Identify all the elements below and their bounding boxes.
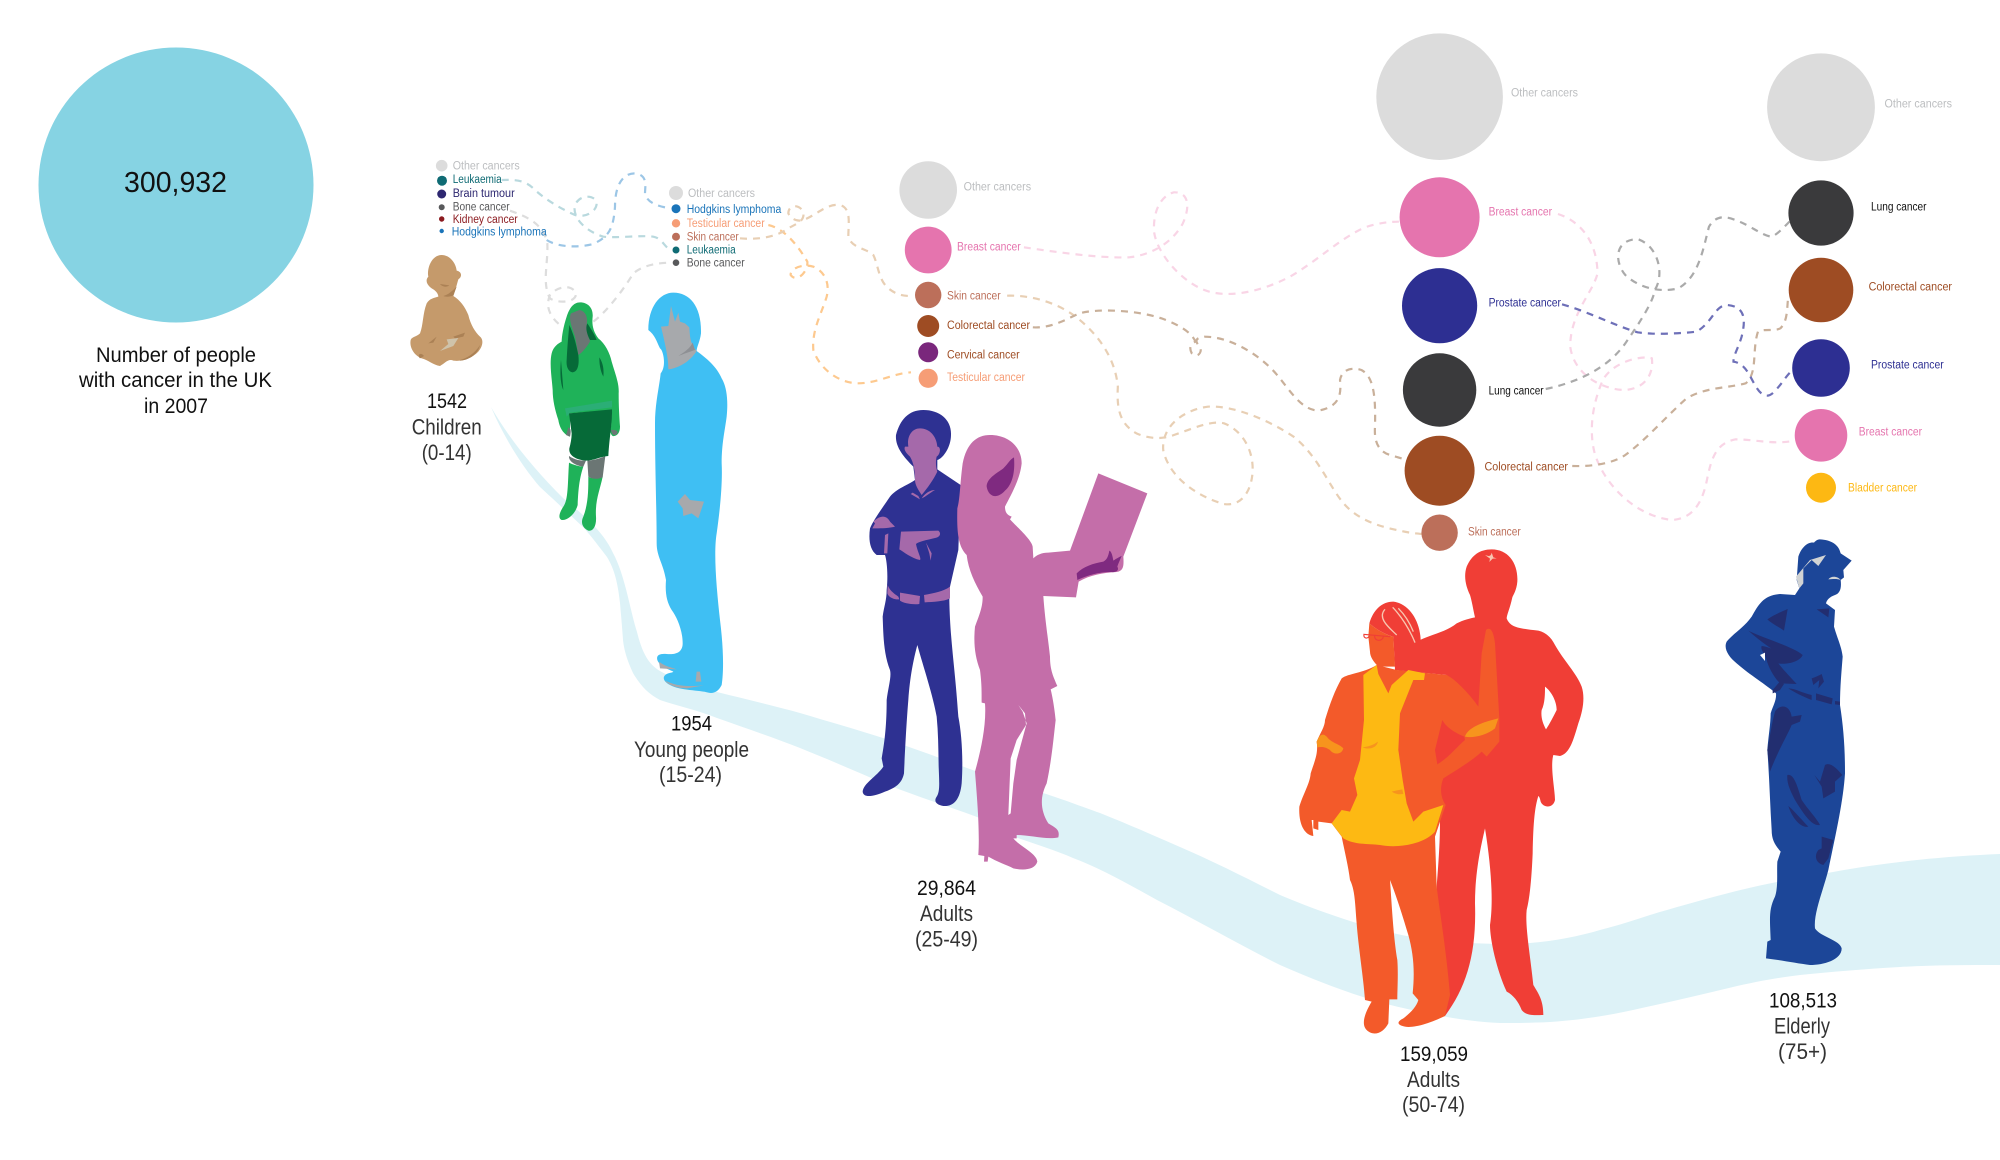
stat: children 0-14: (0-14) [422, 440, 472, 465]
bubbles: adults 25-49 cancers: Other cancers [964, 181, 1031, 193]
legend: children cancers: Brain tumour [453, 188, 515, 200]
legend: young people cancers: Leukaemia [687, 245, 736, 257]
bubbles: adults 25-49 cancers: Cervical cancer [947, 349, 1020, 361]
bubbles: adults 50-74 cancers: Other cancers [1511, 88, 1578, 100]
dashed connector lines: children to young people to adults 25-49 [502, 173, 911, 383]
stat: children 0-14 [412, 390, 482, 465]
stat: adults 25-49: 29,864 [917, 877, 976, 900]
bubbles: adults 50-74 cancers: Lung cancer [1489, 385, 1544, 397]
legend: young people cancers: Other cancers [688, 188, 755, 200]
stat: adults 50-74 [1400, 1043, 1468, 1117]
figure: young man in light blue [648, 293, 727, 693]
dashed connector lines: adults 50-74 to elderly [1546, 214, 1795, 520]
bubbles: elderly cancers: Other cancers [1884, 99, 1952, 111]
legend: children cancers: Leukaemia [453, 174, 502, 186]
bubbles: elderly cancers: Breast cancer [1859, 427, 1922, 439]
bubbles: adults 25-49 cancers: Skin cancer [947, 290, 1001, 302]
stat: young people 15-24: Young people [634, 737, 749, 762]
bubbles: elderly cancers: Lung cancer [1871, 202, 1927, 214]
dashed connector lines: adults 25-49 to adults 50-74 [1007, 192, 1422, 534]
figure: adult man in navy [863, 410, 962, 806]
bubbles: elderly cancers: Prostate cancer [1871, 359, 1944, 371]
bubbles: adults 50-74 cancers: Colorectal cancer [1484, 462, 1568, 474]
stat: children 0-14: Children [412, 414, 482, 440]
bubbles: adults 25-49 cancers: Breast cancer [957, 241, 1021, 253]
figure: young woman in green [551, 302, 620, 531]
stat: elderly 75+: Elderly [1774, 1014, 1830, 1038]
legend: children cancers: Hodgkins lymphoma [452, 226, 547, 238]
stat: adults 50-74: (50-74) [1402, 1092, 1465, 1117]
legend: young people cancers: Bone cancer [687, 257, 745, 269]
bubbles: elderly cancers: Bladder cancer [1848, 483, 1917, 495]
stat: young people 15-24: 1954 [671, 712, 712, 736]
stat: adults 25-49: (25-49) [915, 926, 978, 952]
caption: number of people with cancer [78, 344, 272, 418]
figure: older woman in orange and yellow [1299, 602, 1499, 1033]
legend: children cancers [436, 160, 547, 238]
stat: young people 15-24 [634, 712, 749, 787]
bubbles: adults 50-74 cancers: Prostate cancer [1489, 297, 1561, 309]
bubbles: adults 50-74 cancers: Breast cancer [1489, 207, 1552, 219]
legend: young people cancers: Hodgkins lymphoma [687, 204, 782, 216]
stat: adults 25-49: Adults [920, 901, 973, 926]
stat: elderly 75+ [1769, 990, 1837, 1064]
total circle with headline number: 300,932 [124, 167, 227, 199]
stat: children 0-14: 1542 [427, 390, 467, 413]
bubbles: elderly cancers [1767, 53, 1952, 503]
figure: seated baby [410, 255, 482, 366]
caption: number of people with cancer: Number of people [96, 344, 256, 367]
caption: number of people with cancer: with cancer in the UK [78, 369, 272, 392]
stat: adults 50-74: Adults [1407, 1067, 1460, 1092]
stat: adults 25-49 [915, 877, 978, 952]
bubbles: adults 25-49 cancers [899, 161, 1031, 388]
figure: older man in red [1395, 549, 1583, 1016]
bubbles: adults 50-74 cancers [1376, 33, 1578, 551]
stat: young people 15-24: (15-24) [659, 762, 722, 787]
legend: young people cancers: Skin cancer [687, 232, 739, 244]
bubbles: adults 50-74 cancers: Skin cancer [1468, 527, 1521, 539]
stat: adults 50-74: 159,059 [1400, 1043, 1468, 1066]
winding pathway ribbon [491, 407, 2000, 1023]
bubbles: elderly cancers: Colorectal cancer [1869, 281, 1952, 293]
bubbles: adults 25-49 cancers: Colorectal cancer [947, 320, 1030, 332]
legend: children cancers: Bone cancer [453, 202, 510, 214]
stat: elderly 75+: (75+) [1778, 1039, 1827, 1064]
total circle with headline number [38, 48, 314, 322]
stat: elderly 75+: 108,513 [1769, 990, 1837, 1012]
legend: children cancers: Kidney cancer [453, 214, 518, 226]
legend: young people cancers [669, 186, 782, 269]
caption: number of people with cancer: in 2007 [144, 395, 208, 418]
bubbles: adults 25-49 cancers: Testicular cancer [947, 372, 1025, 384]
legend: young people cancers: Testicular cancer [687, 218, 765, 230]
legend: children cancers: Other cancers [453, 160, 520, 172]
figure: elderly man in blue with cap [1726, 539, 1852, 965]
figure: adult woman in pink with folder [957, 435, 1147, 869]
